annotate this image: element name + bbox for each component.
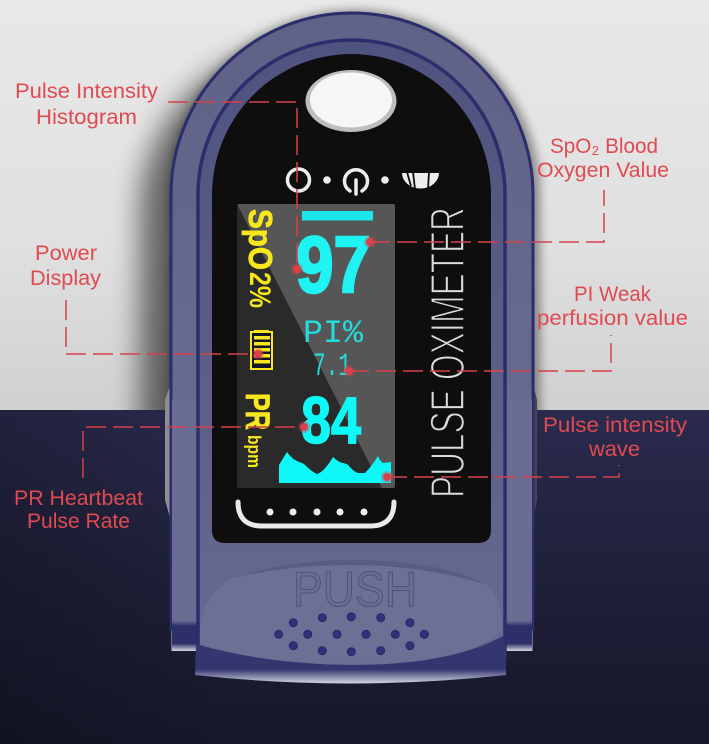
lower body: [195, 636, 506, 684]
display screen: [237, 204, 395, 488]
pi label: PI%: [303, 315, 364, 352]
callout: pulse intensity histogram: [15, 79, 303, 275]
pulse oximeter vertical text: PULSE OXIMETER: [422, 207, 475, 498]
bottom u-shaped bracket with dots: [238, 502, 394, 526]
oximeter device: [165, 13, 537, 684]
pr label: PR: [238, 393, 276, 430]
callout: spo2 blood oxygen value: [364, 134, 669, 248]
callout: power display: Power: [35, 241, 97, 265]
callout: pi weak perfusion value: PI Weak: [574, 282, 651, 306]
side bulges: [165, 380, 172, 525]
callout: pr heartbeat pulse rate: PR Heartbeat: [14, 486, 143, 510]
push text: PUSH: [293, 563, 417, 617]
device shadow: [140, 10, 540, 440]
pr label: [238, 393, 276, 468]
callout: pulse intensity wave: [381, 413, 687, 483]
pulse intensity histogram bar: [302, 211, 373, 220]
callout: power display: [30, 241, 264, 360]
sensor window: [306, 70, 396, 132]
wing feet: [172, 400, 198, 651]
callout: pi weak perfusion value: perfusion value: [537, 306, 688, 330]
icon: signal bars: [402, 172, 439, 189]
callout: pulse intensity histogram: Histogram: [36, 105, 137, 129]
pulse wave chart: [279, 452, 391, 483]
callout: power display: Display: [30, 266, 101, 290]
battery icon: [251, 330, 272, 369]
callout: pr heartbeat pulse rate: [14, 421, 310, 533]
callout: pr heartbeat pulse rate: Pulse Rate: [27, 509, 130, 533]
callout: spo2 blood oxygen value: Oxygen Value: [537, 158, 669, 182]
status icons: [288, 169, 439, 194]
push dome: [200, 560, 502, 664]
device shell: [171, 13, 533, 651]
spo2 label: 2%: [243, 272, 276, 308]
dome top edge shade: [232, 560, 488, 585]
spo2 label: SpO: [242, 209, 279, 270]
spo2 value: 97: [296, 220, 371, 309]
spo2 label: [242, 209, 279, 308]
icon: pulse ring: [288, 169, 310, 191]
icon: power: [344, 170, 368, 194]
callout: pulse intensity wave: Pulse intensity: [543, 413, 687, 437]
grip dots: [275, 613, 428, 656]
callout: pulse intensity histogram: Pulse Intensity: [15, 79, 158, 103]
pi value: 7.1: [313, 348, 351, 385]
pr label: bpm: [244, 435, 264, 468]
callout: spo2 blood oxygen value: SpO₂ Blood: [550, 134, 658, 158]
callout: pulse intensity wave: wave: [588, 437, 640, 461]
pulse rate value: 84: [301, 383, 361, 457]
callout: pi weak perfusion value: [343, 282, 688, 377]
black panel: [212, 54, 491, 543]
inner rim: [198, 40, 505, 670]
